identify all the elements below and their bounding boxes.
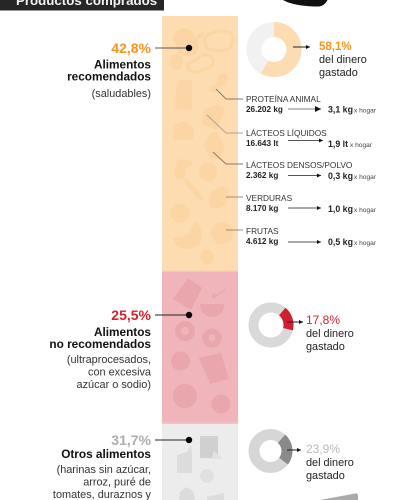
food icons: not recommended [171,278,230,414]
row: lácteos densos/polvo: 0,3 kg [328,171,353,181]
row: verduras: 1,0 kg [328,204,353,214]
callout: recommended 42,8% [111,40,192,56]
callout: not recommended 25,5%: 25,5% [111,307,152,323]
header: productos comprados [0,0,164,10]
top black shape [283,0,328,6]
row: proteína animal: x hogar [354,108,377,114]
row: verduras: VERDURAS [246,193,293,203]
callout: other foods 31,7% [111,432,192,448]
bottom gray shape [320,493,358,500]
callout: not recommended 25,5% [111,307,192,323]
donut chart: 17,8% spent on not recommended [246,300,303,350]
text: alimentos recomendados [67,58,151,100]
row: frutas: FRUTAS [246,226,279,236]
text: 58,1% del dinero gastado: 58,1% [319,41,352,53]
text: 17,8% del dinero gastado [306,313,354,353]
row: lácteos densos/polvo [213,152,377,181]
row: frutas: 0,5 kg [328,237,353,247]
row: frutas: x hogar [354,240,377,247]
text: alimentos no recomendados: con excesiva [88,366,152,378]
text: alimentos no recomendados: no recomendados [49,337,151,351]
text: otros alimentos: (harinas sin azúcar, [57,464,151,476]
row: lácteos densos/polvo: LÁCTEOS DENSOS/POLVO [246,160,353,170]
text: alimentos recomendados: recomendados [67,70,151,84]
row: proteína animal: PROTEÍNA ANIMAL [246,94,321,104]
row: lácteos líquidos [207,115,373,149]
text: 23,9% del dinero gastado: 23,9% [306,442,340,456]
row: lácteos líquidos: LÁCTEOS LÍQUIDOS [246,128,327,138]
text: alimentos no recomendados: Alimentos [94,325,151,339]
row: verduras [226,193,377,214]
row: frutas: 4.612 kg [246,237,278,246]
panel: other foods column [162,422,238,500]
text: alimentos recomendados: (saludables) [92,88,151,100]
text: 58,1% del dinero gastado [319,41,367,79]
donut chart: 58,1% spent on recommended [254,30,310,70]
row: lácteos líquidos: x hogar [350,142,373,149]
text: 23,9% del dinero gastado: del dinero [306,457,354,469]
text: 23,9% del dinero gastado [306,442,354,482]
callout: recommended 42,8%: 42,8% [111,40,152,56]
text: otros alimentos: arroz, puré de [83,476,151,488]
row: lácteos líquidos: 1,9 lt [328,139,348,149]
row: frutas [226,226,377,247]
row: proteína animal: 3,1 kg [328,104,353,114]
text: 17,8% del dinero gastado: gastado [306,341,345,353]
row: lácteos densos/polvo: 2.362 kg [246,171,278,180]
row: verduras: 8.170 kg [246,204,278,213]
text: otros alimentos [53,447,152,500]
row: lácteos líquidos: 16.643 lt [246,139,279,148]
callout: other foods 31,7%: 31,7% [111,432,152,448]
row: proteína animal: 26.202 kg [246,105,283,114]
panel: recommended foods column [162,16,238,270]
row: proteína animal [216,89,377,114]
text: 17,8% del dinero gastado: 17,8% [306,313,340,327]
text: 23,9% del dinero gastado: gastado [306,470,345,482]
donut chart: 23,9% spent on other foods [247,428,301,474]
row: lácteos densos/polvo: x hogar [354,174,377,181]
text: 17,8% del dinero gastado: del dinero [306,328,354,340]
text: otros alimentos: Otros alimentos [61,447,151,461]
text: alimentos recomendados: Alimentos [94,58,151,72]
panel: not recommended foods column [162,270,238,422]
food icons: other foods [177,436,224,500]
text: 58,1% del dinero gastado: gastado [319,67,358,79]
food icons: recommended [170,28,233,265]
text: alimentos no recomendados [49,325,152,391]
row: verduras: x hogar [354,207,377,214]
text: alimentos no recomendados: azúcar o sodio) [77,379,151,391]
text: 58,1% del dinero gastado: del dinero [319,54,367,66]
text: alimentos no recomendados: (ultraprocesados, [67,354,151,366]
